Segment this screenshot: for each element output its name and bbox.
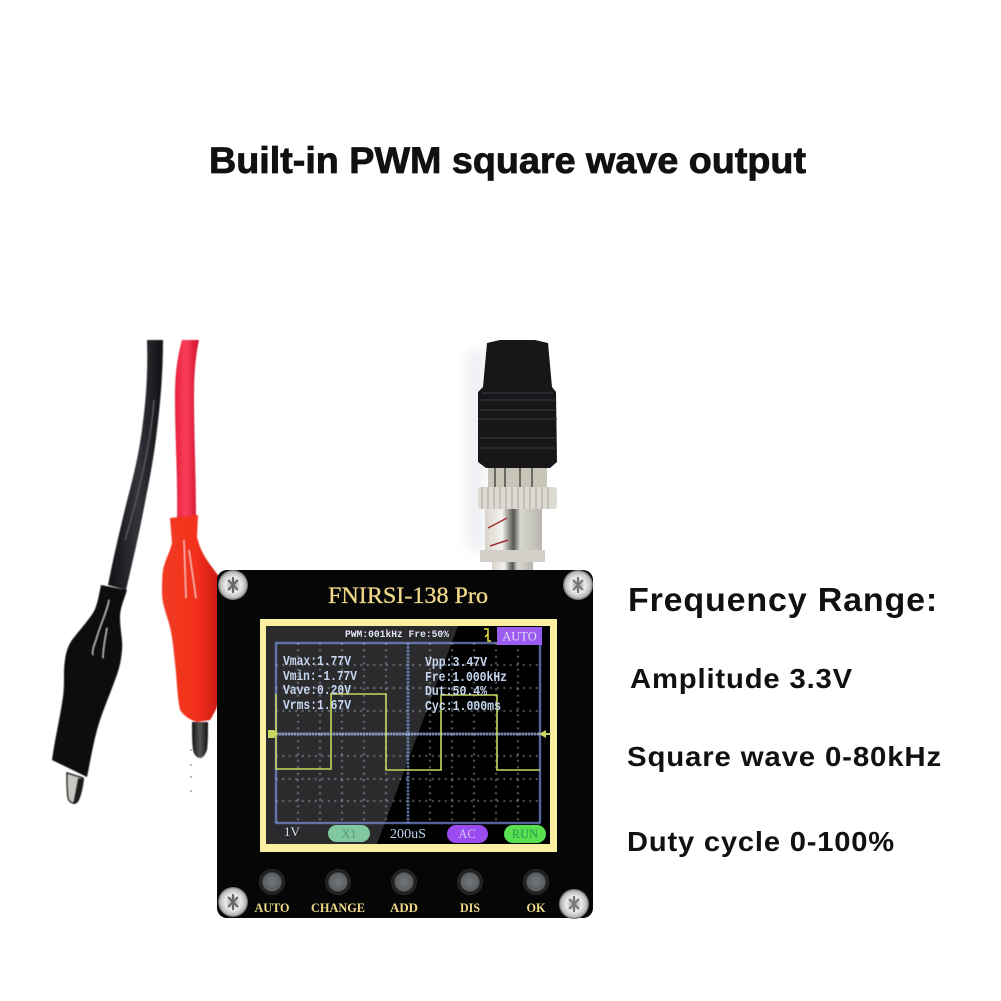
- measurements right: Vpp:3.47V: [425, 655, 487, 671]
- button: ADD: [390, 869, 418, 915]
- trigger icon: [484, 629, 491, 641]
- screen: [266, 626, 550, 844]
- device body: [217, 570, 593, 918]
- icon: black probe lead and clip: [52, 340, 163, 804]
- title: Built-in PWM square wave output: [209, 140, 806, 181]
- button: CHANGE: [311, 869, 365, 915]
- screw: top left: [218, 570, 248, 600]
- PWM header text: PWM:001kHz Fre:50%: [345, 629, 449, 641]
- chart: square wave: [276, 694, 540, 770]
- status: X1 pill: X1: [341, 827, 357, 841]
- status: RUN pill: RUN: [512, 827, 538, 841]
- trigger markers: [268, 730, 551, 738]
- measurements right: Dut:50.4%: [425, 684, 487, 700]
- status: AC pill: [447, 825, 488, 843]
- measurements right: Cyc:1.000ms: [425, 699, 501, 715]
- measurements left: Vrms:1.67V: [283, 698, 351, 714]
- small background print dots: [190, 750, 192, 791]
- screen frame: [260, 619, 557, 852]
- screen reflection: [266, 626, 458, 844]
- button: OK: OK: [526, 900, 546, 915]
- status: AC pill: AC: [458, 827, 476, 841]
- status: RUN pill: [504, 825, 546, 843]
- measurements left: Vmax:1.77V: [283, 654, 351, 670]
- screw: top right: [563, 570, 593, 600]
- button: DIS: DIS: [460, 900, 480, 915]
- status: 1V: 1V: [284, 824, 300, 839]
- button: AUTO: AUTO: [254, 900, 290, 915]
- measurements left: [283, 654, 357, 714]
- text: square wave range: Square wave 0-80kHz: [627, 741, 942, 772]
- screw: bottom right: [559, 889, 589, 919]
- grid: [276, 643, 540, 823]
- icon: BNC connector: [478, 340, 557, 573]
- text: duty cycle range: Duty cycle 0-100%: [627, 826, 895, 857]
- measurements left: Vave:0.20V: [283, 683, 351, 699]
- screw: bottom left: [218, 887, 248, 917]
- status: X1 pill: [328, 825, 370, 842]
- measurements right: Fre:1.000kHz: [425, 670, 507, 686]
- measurements left: Vmin:-1.77V: [283, 669, 357, 685]
- text: Frequency Range heading: Frequency Range:: [628, 582, 938, 619]
- measurements right: [425, 655, 507, 715]
- connector shadow: [468, 350, 484, 550]
- button: AUTO: [254, 869, 290, 915]
- button: ADD: ADD: [390, 900, 418, 915]
- panel: oscilloscope device: [217, 570, 593, 919]
- button: OK: [523, 869, 549, 915]
- icon: red probe lead and clip: [162, 340, 220, 758]
- AUTO badge: [497, 627, 542, 645]
- status: 200uS: 200uS: [390, 827, 426, 842]
- text: amplitude: Amplitude 3.3V: [630, 663, 853, 694]
- AUTO badge: AUTO: [502, 630, 537, 644]
- button: CHANGE: CHANGE: [311, 900, 365, 915]
- device brand name: FNIRSI-138 Pro: [328, 583, 488, 608]
- button: DIS: [457, 869, 483, 915]
